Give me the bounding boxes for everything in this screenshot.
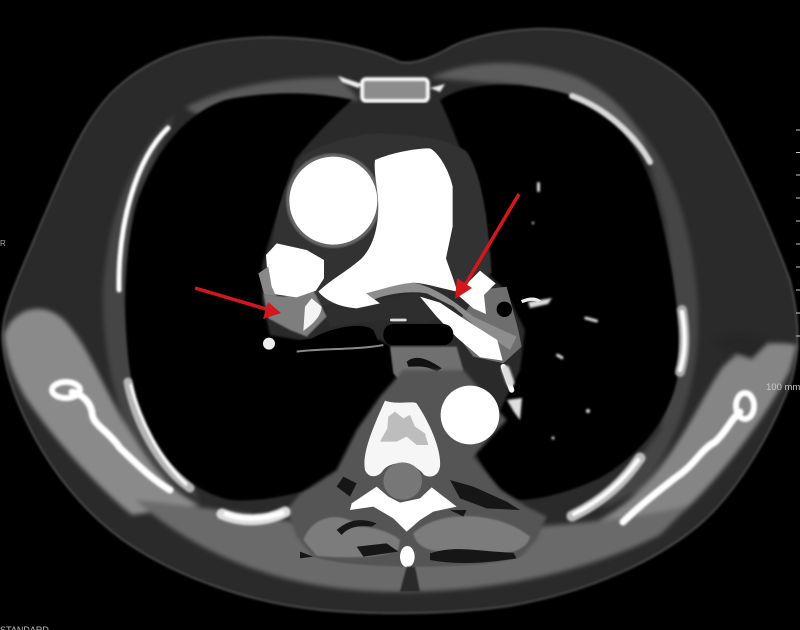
spinal canal — [383, 462, 422, 500]
pulmonary arterial wall — [365, 283, 517, 350]
dark fat streaks — [300, 477, 520, 563]
scale ticks — [796, 130, 800, 336]
left lung vessel — [522, 299, 540, 302]
sternum — [338, 76, 445, 101]
muscle: right latissimus — [590, 343, 797, 525]
left upper vein — [457, 271, 496, 314]
esophageal lumen — [407, 358, 442, 372]
descending left vessels — [503, 367, 512, 390]
right hilar soft tissue — [263, 290, 327, 337]
paraspinal tissue — [287, 370, 547, 575]
muscle: upper chest left — [185, 78, 360, 118]
muscle: left latissimus — [4, 309, 200, 515]
rib: posterior left — [222, 512, 285, 520]
rib: upper right — [572, 96, 650, 162]
calcified node detail — [258, 267, 276, 296]
arrow: right hilum — [195, 288, 281, 319]
esophagus — [390, 347, 463, 390]
right lower branch — [303, 298, 322, 331]
lung: left of image — [125, 93, 405, 500]
paraspinal muscle — [303, 516, 530, 557]
pulmonary trunk and arteries — [318, 148, 457, 308]
left hilar soft tissue — [453, 287, 522, 363]
descending aorta — [441, 386, 499, 444]
trapezius strip — [280, 543, 553, 587]
rib: lower right — [572, 458, 640, 516]
arrow: left pulmonary artery — [455, 194, 519, 299]
scapula: left — [72, 392, 170, 490]
muscle: left chest wall — [103, 115, 200, 500]
right hilar vessel — [266, 243, 324, 297]
spinous process tip — [400, 546, 415, 567]
carina calcification — [390, 319, 407, 321]
scale label: 100 mm — [766, 382, 800, 393]
muscle: right chest wall — [600, 130, 698, 510]
rib: lower left — [128, 382, 190, 488]
ribs — [119, 96, 684, 520]
vertebral body — [364, 401, 440, 477]
muscle: posterior band — [135, 500, 690, 592]
lung vessels — [500, 182, 598, 440]
orientation label: R — [0, 239, 6, 248]
spine and descending aorta — [280, 370, 553, 592]
left pulmonary artery branch — [420, 297, 503, 361]
airway bronchus right — [283, 326, 380, 352]
scapulae — [52, 382, 754, 522]
aortic wall glow — [286, 153, 381, 248]
posterior midline — [400, 567, 420, 592]
left bronchus — [497, 302, 512, 317]
scapula: right — [623, 412, 740, 522]
lungs — [125, 85, 679, 500]
dark fat streak right — [712, 333, 770, 360]
trachea carina — [383, 324, 453, 345]
trabecular bone — [380, 412, 428, 445]
ascending aorta — [289, 157, 377, 245]
bronchial septum line — [297, 345, 383, 352]
subcarinal fat — [327, 293, 440, 327]
mediastinal fat — [273, 133, 492, 307]
small vessel — [263, 338, 275, 350]
vertebral lamina — [350, 487, 457, 532]
muscle: upper chest right — [430, 63, 655, 160]
rib: upper left — [119, 128, 168, 290]
rib: mid right — [680, 310, 684, 372]
mediastinum and hilar vessels — [258, 133, 540, 390]
lung: right of image — [440, 85, 679, 500]
